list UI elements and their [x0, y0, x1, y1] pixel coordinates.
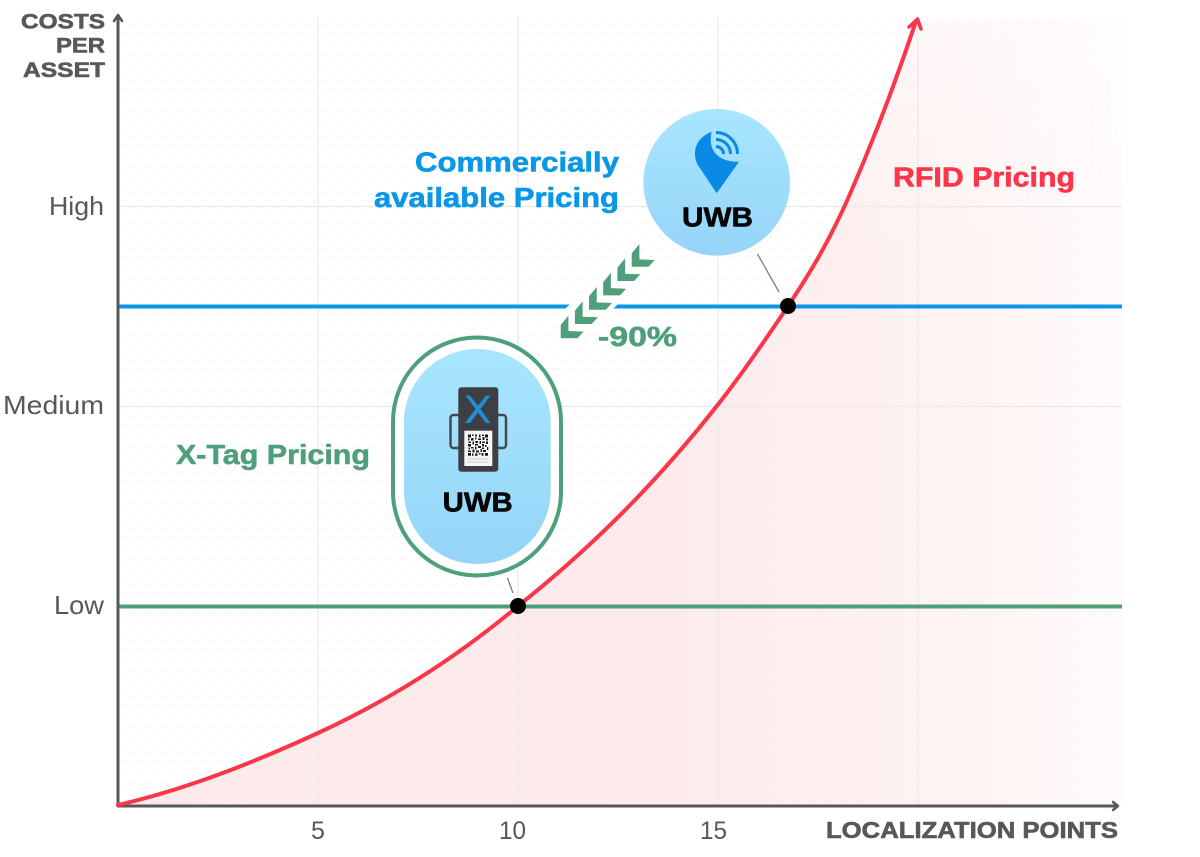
- -90% label: -90%: [598, 321, 677, 352]
- x axis tick labels: [311, 817, 727, 845]
- x-tag pricing line: [118, 604, 1122, 608]
- y axis title: [21, 10, 105, 82]
- RFID pricing curve: [118, 19, 921, 805]
- y axis: [114, 15, 122, 806]
- X-Tag pill: UWB: [443, 487, 513, 518]
- x axis tick labels: 5: [311, 817, 325, 845]
- -90% chevron arrow: [561, 244, 655, 338]
- commercially available pricing line: [118, 304, 1122, 308]
- x axis: [118, 802, 1118, 810]
- y axis tick labels: Medium: [3, 390, 104, 420]
- label: commercially available pricing: available Pricing: [374, 182, 619, 213]
- x axis tick labels: 15: [700, 817, 727, 845]
- icon: X-Tag device: [450, 387, 506, 472]
- intersection point: X-Tag pricing: [510, 598, 526, 614]
- y axis tick labels: Low: [54, 590, 104, 620]
- label: RFID pricing: RFID Pricing: [893, 162, 1075, 192]
- label: commercially available pricing: Commercially: [415, 146, 619, 178]
- intersection point: commercial pricing: [780, 298, 796, 314]
- X-Tag pill: [393, 338, 561, 576]
- area under RFID pricing curve: [118, 16, 1122, 805]
- chart background: dot pattern: [120, 16, 1122, 805]
- icon: location pin with signal: [695, 132, 739, 193]
- UWB commercial bubble: [643, 109, 790, 256]
- y axis title: COSTS: [21, 10, 105, 34]
- y axis title: ASSET: [23, 59, 105, 82]
- label: commercially available pricing: [374, 146, 619, 213]
- x axis tick labels: 10: [499, 817, 526, 845]
- leader line: X-Tag pill to curve: [508, 578, 513, 593]
- UWB commercial bubble: UWB: [682, 202, 753, 233]
- y axis tick labels: High: [49, 191, 104, 221]
- leader line: UWB bubble to curve: [758, 254, 779, 292]
- y axis title: PER: [56, 34, 105, 58]
- label: x-tag pricing: X-Tag Pricing: [176, 439, 370, 470]
- y axis tick labels: [3, 191, 104, 620]
- x axis title: LOCALIZATION POINTS: [826, 817, 1118, 843]
